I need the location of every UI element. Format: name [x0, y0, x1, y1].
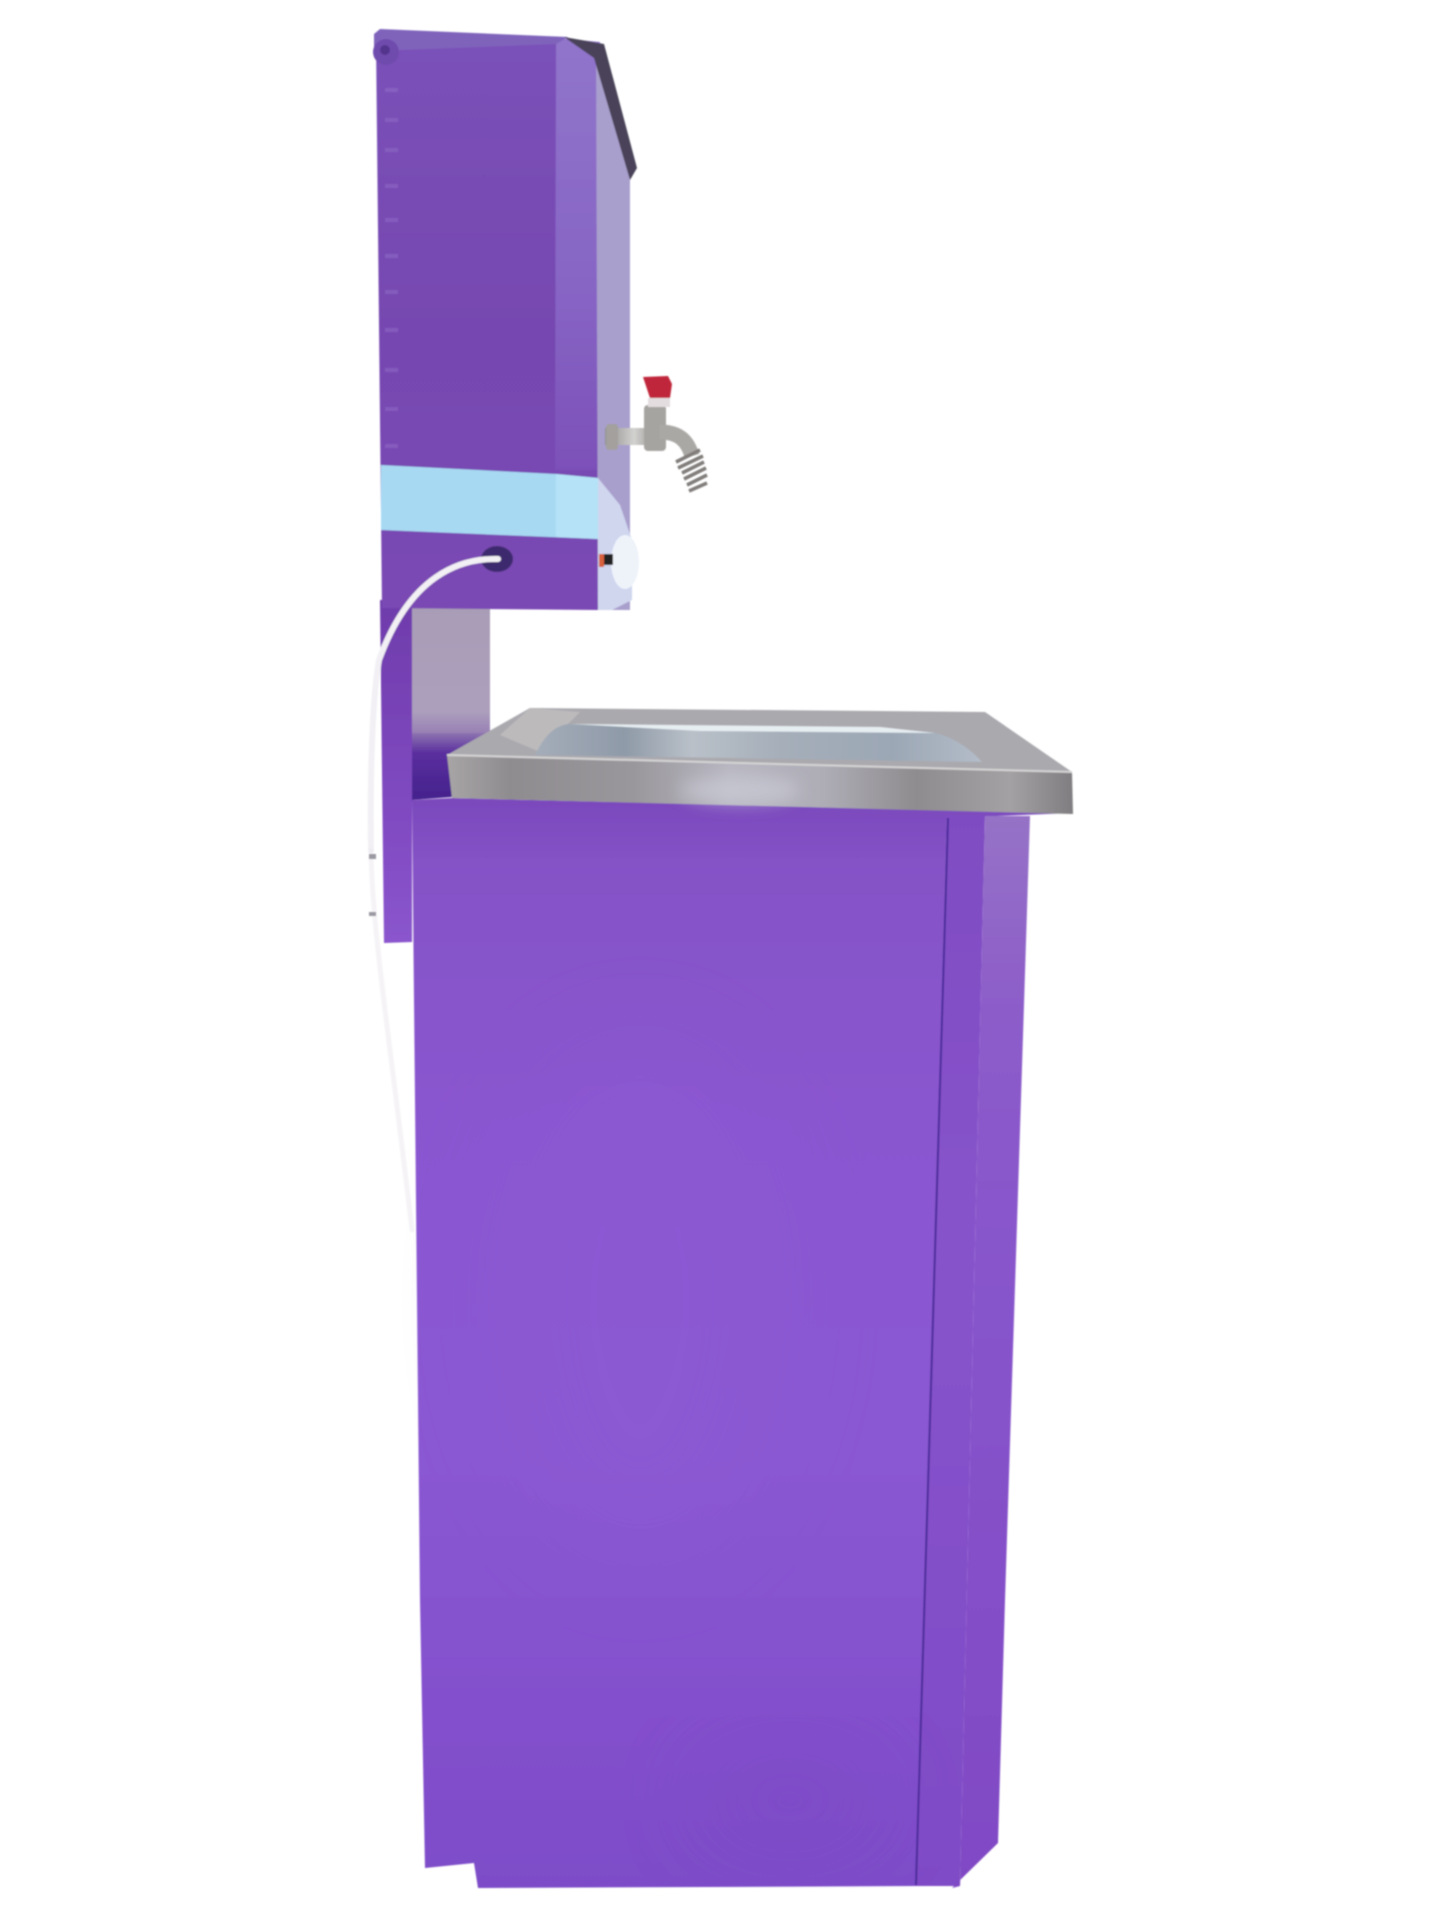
power cable grommet	[481, 546, 513, 572]
tap body	[644, 405, 666, 451]
sink rim top	[447, 708, 1072, 772]
water tap	[605, 376, 707, 491]
cabinet door panel	[412, 798, 1072, 1888]
stainless steel sink	[447, 708, 1073, 814]
cabinet soft highlights	[490, 1040, 880, 1840]
tank front panel	[376, 40, 598, 610]
sink front face	[447, 755, 1073, 814]
cabinet corner strip	[952, 816, 1030, 1888]
white side patch	[598, 478, 632, 610]
tap hose nozzle	[676, 450, 707, 491]
tap inlet pipe	[605, 428, 663, 445]
wall-mounted water tank	[373, 29, 639, 610]
sink basin	[535, 724, 982, 762]
tank mounting bolt	[373, 39, 399, 65]
stainless upright pillar	[412, 606, 490, 800]
sink upper edge	[447, 755, 1072, 772]
light blue band	[381, 465, 598, 539]
thermostat knob	[599, 535, 639, 589]
sink front reflection	[680, 776, 800, 804]
rear support column	[380, 600, 412, 943]
door seam	[916, 818, 948, 1885]
tank roof flap	[564, 37, 637, 180]
cabinet side panel	[916, 815, 985, 1886]
tank top lip	[374, 29, 568, 58]
illustration: purple hand-wash station	[369, 29, 1073, 1888]
tank side panel	[596, 44, 630, 610]
tank corner strip	[555, 38, 600, 470]
power cable	[369, 559, 498, 1230]
cabinet body	[412, 798, 1072, 1888]
tank seam dimples	[385, 88, 398, 448]
tap red handle	[643, 376, 672, 398]
